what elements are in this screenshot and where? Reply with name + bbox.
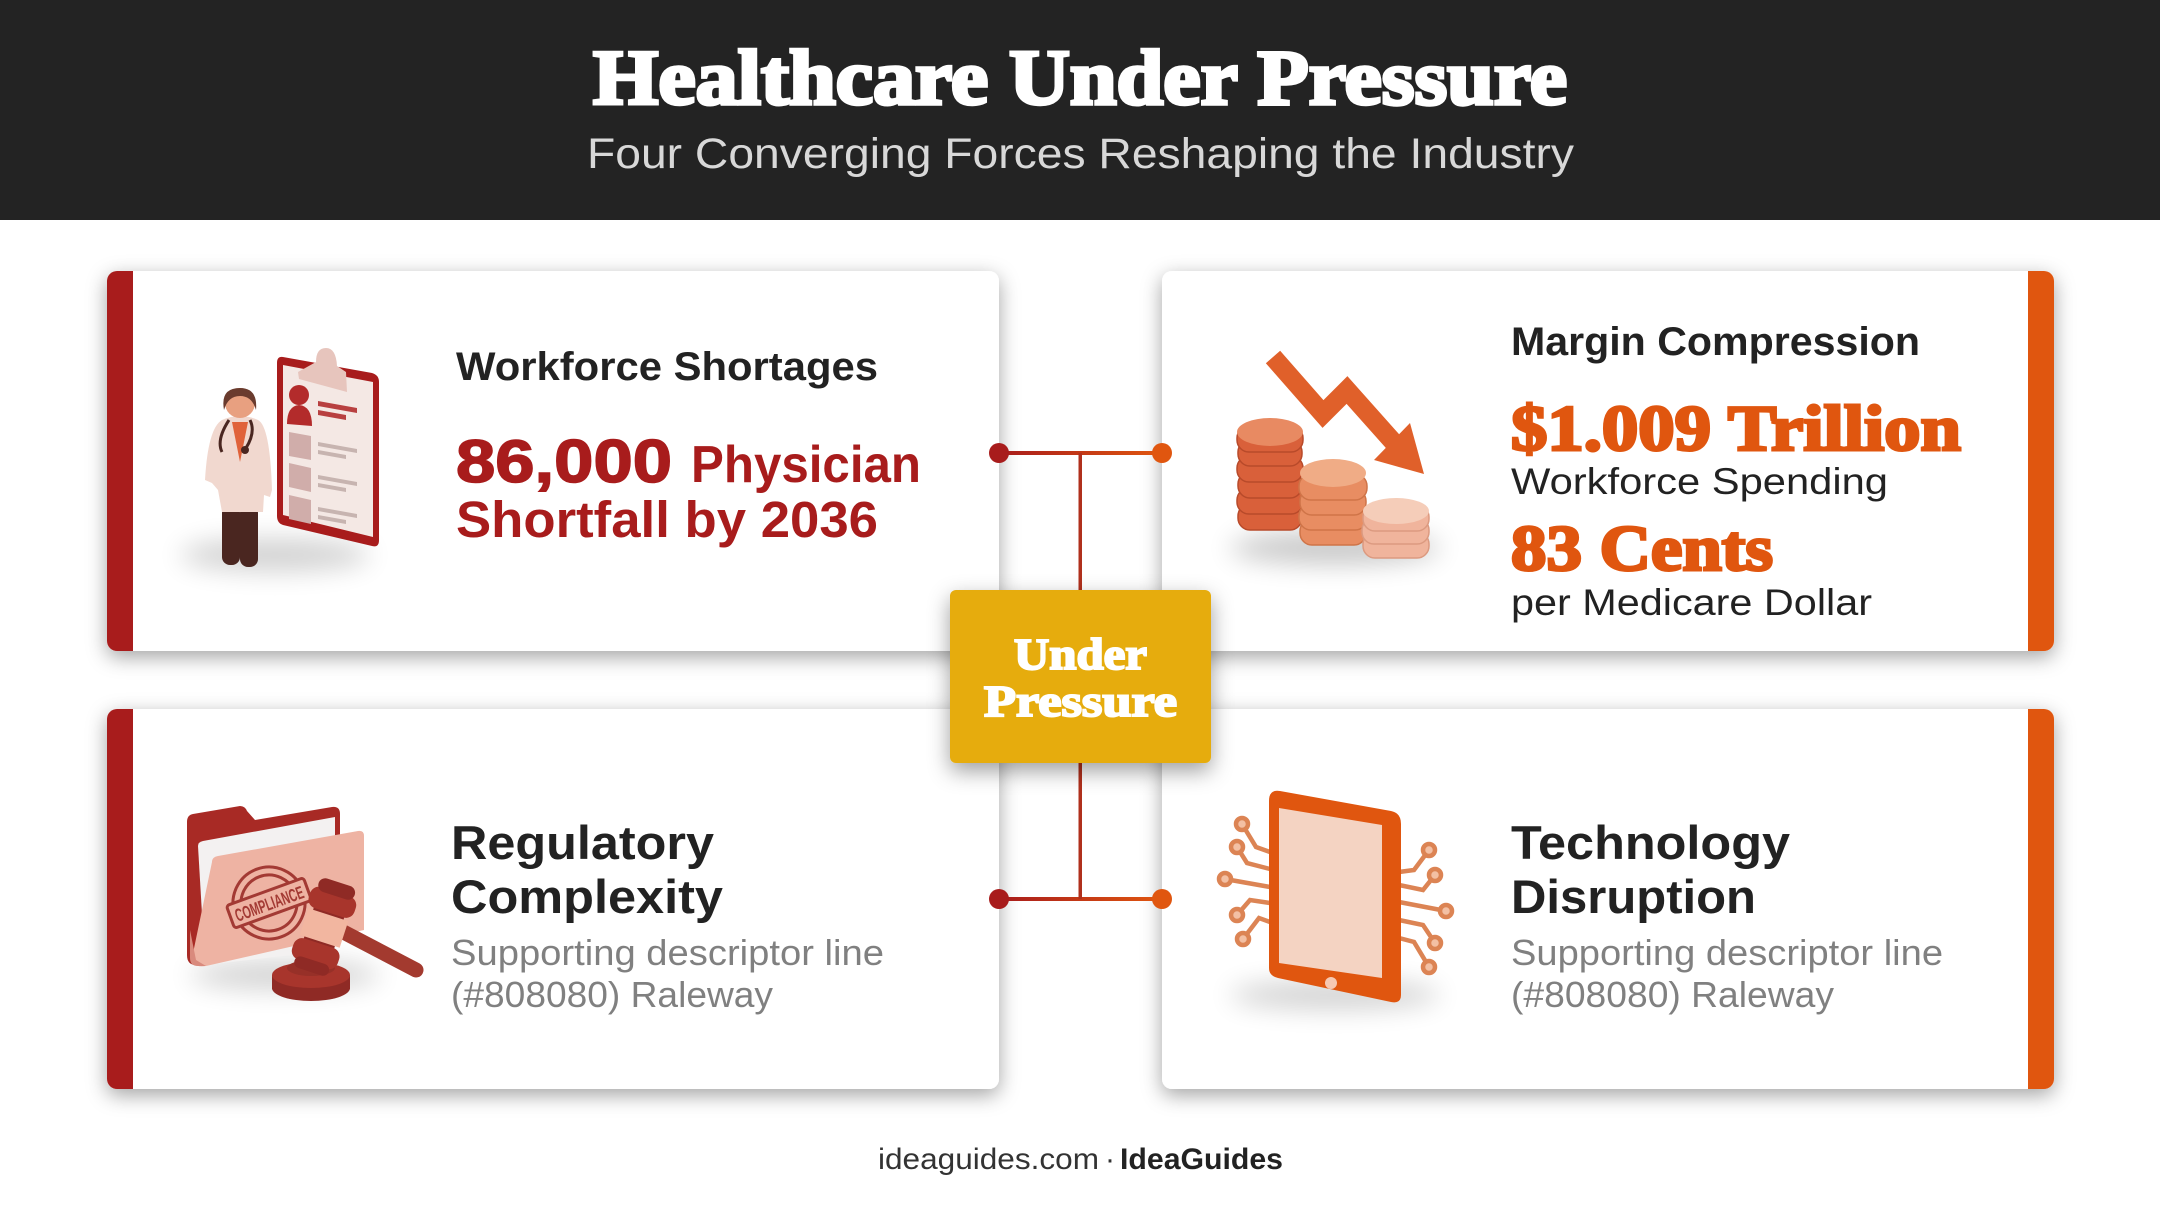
footer credit: IdeaGuides bbox=[1120, 1143, 1283, 1176]
stat: physician shortfall: Shortfall by 2036 bbox=[456, 491, 878, 548]
heading: technology disruption: Technology bbox=[1511, 816, 1790, 869]
descriptor: (#808080) Raleway bbox=[451, 974, 773, 1015]
center box: under pressure bbox=[950, 590, 1211, 763]
stat: physician shortfall: 86,000 bbox=[456, 428, 672, 495]
heading: technology disruption bbox=[1511, 816, 1790, 923]
title: Healthcare Under Pressure bbox=[593, 34, 1567, 121]
stamp bbox=[218, 855, 320, 951]
icon: folder, stamp and gavel bbox=[187, 806, 416, 1001]
footer credit bbox=[878, 1143, 1283, 1176]
icon: tablet with circuit bbox=[1219, 791, 1452, 1009]
stat: workforce spending: Workforce Spending bbox=[1511, 461, 1888, 502]
heading: regulatory complexity: Regulatory bbox=[451, 816, 714, 869]
descriptor bbox=[1511, 932, 1943, 1015]
descriptor: (#808080) Raleway bbox=[1511, 974, 1834, 1015]
stat: physician shortfall: Physician bbox=[691, 436, 921, 494]
panel: regulatory complexity bbox=[107, 709, 999, 1089]
panel: workforce shortages bbox=[107, 271, 999, 651]
stat: medicare dollar: per Medicare Dollar bbox=[1511, 582, 1872, 623]
heading: regulatory complexity: Complexity bbox=[451, 870, 723, 923]
center box: under pressure: Pressure bbox=[984, 677, 1177, 726]
subtitle: Four Converging Forces Reshaping the Industry bbox=[587, 130, 1575, 178]
heading: regulatory complexity bbox=[451, 816, 723, 923]
icon: doctor and clipboard bbox=[180, 348, 379, 571]
stat: medicare dollar bbox=[1511, 513, 1872, 623]
stamp: COMPLIANCE bbox=[232, 882, 307, 926]
heading: workforce shortages: Workforce Shortages bbox=[456, 345, 878, 389]
stat: medicare dollar: 83 Cents bbox=[1511, 513, 1773, 585]
center box: under pressure: Under bbox=[1014, 630, 1147, 679]
panel: technology disruption bbox=[1162, 709, 2054, 1089]
stat: workforce spending: $1.009 Trillion bbox=[1511, 393, 1961, 465]
stat: workforce spending bbox=[1511, 393, 1961, 502]
footer credit: · bbox=[1105, 1143, 1115, 1176]
descriptor: Supporting descriptor line bbox=[451, 932, 884, 973]
icon: falling coins and arrow bbox=[1230, 357, 1440, 564]
descriptor bbox=[451, 932, 884, 1015]
heading: technology disruption: Disruption bbox=[1511, 870, 1756, 923]
heading: margin compression: Margin Compression bbox=[1511, 320, 1920, 364]
connector: top bbox=[989, 443, 1172, 593]
connector: bottom bbox=[989, 760, 1172, 909]
stat: physician shortfall bbox=[456, 428, 921, 548]
descriptor: Supporting descriptor line bbox=[1511, 932, 1943, 973]
panel: margin compression bbox=[1162, 271, 2054, 651]
header band bbox=[0, 0, 2160, 220]
footer credit: ideaguides.com bbox=[878, 1143, 1099, 1176]
